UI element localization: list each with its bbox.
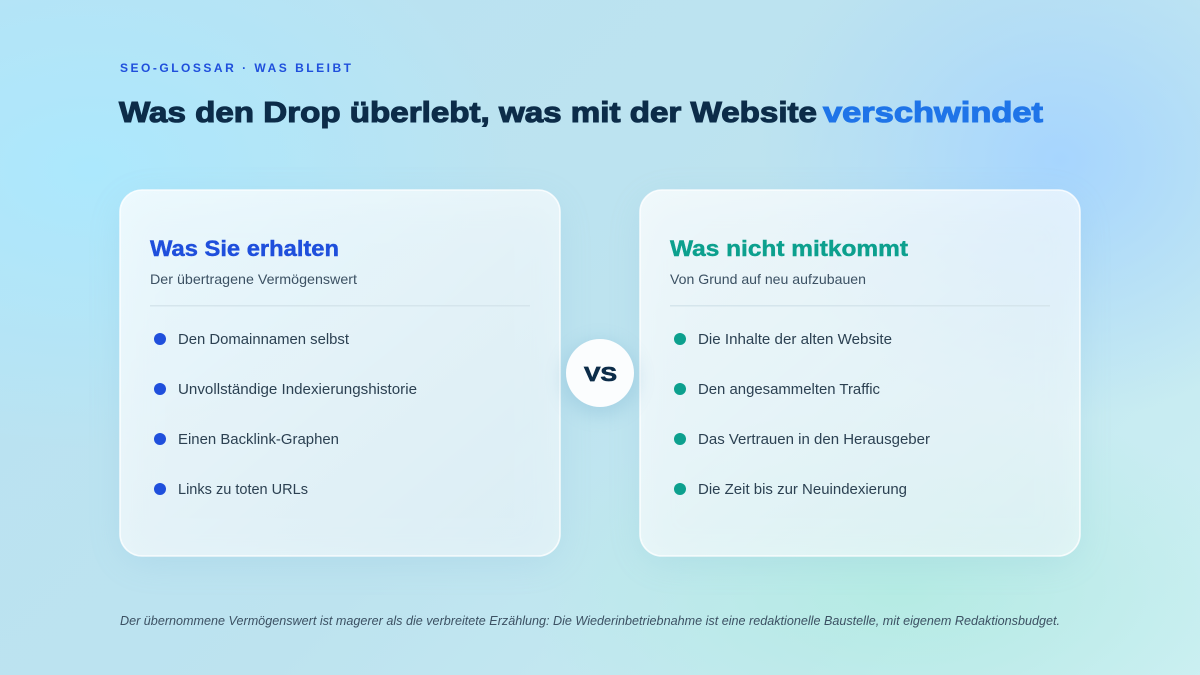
list: right card: Die Inhalte der alten Website [698, 331, 892, 348]
subtitle: left card: Der übertragene Vermögenswert [150, 272, 357, 287]
vs badge [562, 339, 638, 416]
list: left card: Den Domainnamen selbst [178, 331, 350, 348]
list: right card: Die Zeit bis zur Neuindexierung [698, 481, 907, 498]
eyebrow: SEO-GLOSSAR · WAS BLEIBT [120, 61, 352, 75]
title: Was den Drop überlebt, was mit der Website [119, 97, 817, 129]
subtitle: right card: Von Grund auf neu aufzubauen [670, 272, 866, 287]
heading: left card: Was Sie erhalten [150, 236, 339, 261]
panel: was nicht mitkommt [640, 190, 1080, 562]
list: right card [674, 331, 930, 498]
list: left card: Einen Backlink-Graphen [178, 431, 339, 448]
list: left card [154, 331, 417, 498]
list: left card: Unvollständige Indexierungshistorie [178, 381, 417, 398]
title: verschwindet [823, 97, 1043, 129]
list: right card: Den angesammelten Traffic [698, 381, 880, 398]
panel: was Sie erhalten [120, 190, 560, 562]
list: left card: Links zu toten URLs [178, 481, 308, 498]
footnote: Der übernommene Vermögenswert ist magerer als die verbreitete Erzählung: Die Wiederinbetriebnahme ist eine redaktionelle Baustelle, mit eigenem Redaktionsbudget. [120, 614, 1060, 628]
list: right card: Das Vertrauen in den Herausgeber [698, 431, 930, 448]
title [119, 97, 1043, 129]
vs badge: VS [584, 364, 617, 386]
heading: right card: Was nicht mitkommt [670, 236, 909, 261]
